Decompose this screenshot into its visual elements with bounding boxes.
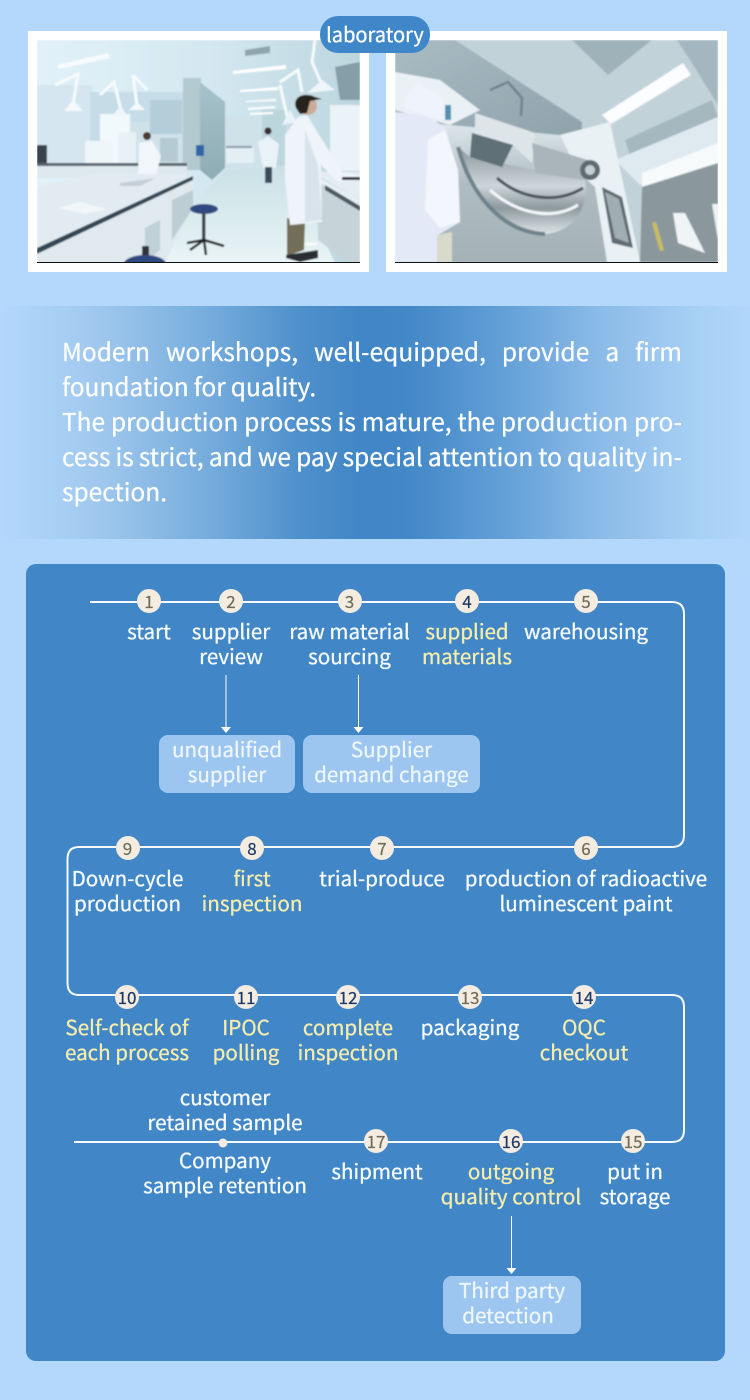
box: third party detection bbox=[443, 1276, 581, 1334]
step 8: first inspection: first bbox=[233, 862, 271, 892]
step 9: down-cycle production bbox=[72, 835, 183, 917]
box: supplier demand change: Supplier bbox=[351, 733, 432, 763]
text band: description bbox=[0, 306, 750, 539]
step 7: trial-produce bbox=[319, 835, 445, 892]
box: supplier demand change: demand change bbox=[314, 758, 469, 788]
step 6: production of radioactive luminescent paint bbox=[465, 835, 707, 917]
panel: process flowchart bbox=[26, 564, 725, 1361]
step 10: self-check of each process bbox=[65, 984, 190, 1066]
step 12: complete inspection: inspection bbox=[298, 1036, 398, 1066]
step 15: put in storage: put in bbox=[607, 1155, 663, 1185]
step 5: warehousing: warehousing bbox=[524, 615, 648, 645]
step 16: outgoing quality control bbox=[441, 1128, 581, 1210]
step 7: trial-produce: trial-produce bbox=[319, 862, 445, 892]
step 1: start: start bbox=[127, 615, 171, 645]
step 13: packaging bbox=[421, 984, 520, 1041]
box: third party detection: Third party bbox=[459, 1274, 565, 1304]
step 16: outgoing quality control: quality control bbox=[441, 1180, 581, 1210]
step 14: OQC checkout: 14 bbox=[575, 984, 593, 1009]
step 6: production of radioactive luminescent paint: production of radioactive bbox=[465, 862, 707, 892]
panel: laboratory photos bbox=[28, 16, 727, 272]
step 16: outgoing quality control: outgoing bbox=[468, 1155, 554, 1185]
step 3: raw material sourcing: 3 bbox=[345, 588, 354, 613]
step 9: down-cycle production: production bbox=[74, 887, 181, 917]
step 6: production of radioactive luminescent paint: luminescent paint bbox=[499, 887, 673, 917]
step 3: raw material sourcing bbox=[289, 588, 410, 670]
step 2: supplier review: 2 bbox=[226, 588, 236, 613]
step 9: down-cycle production: 9 bbox=[123, 835, 132, 860]
big bench bbox=[37, 173, 193, 248]
step 17: shipment: shipment bbox=[331, 1155, 423, 1185]
step 9: down-cycle production: Down-cycle bbox=[72, 862, 183, 892]
fume arms bbox=[55, 40, 322, 120]
person: back bbox=[143, 132, 151, 140]
label: company sample retention: Company bbox=[179, 1144, 271, 1174]
step 6: production of radioactive luminescent paint: 6 bbox=[581, 835, 591, 860]
step 2: supplier review bbox=[192, 588, 270, 670]
label: company sample retention: sample retention bbox=[143, 1169, 307, 1199]
label: customer retained sample: retained sample bbox=[147, 1106, 303, 1136]
person: far bbox=[264, 127, 272, 135]
step 11: IPOC polling: polling bbox=[213, 1036, 279, 1066]
step 11: IPOC polling: 11 bbox=[237, 984, 255, 1009]
wall lower bbox=[395, 120, 607, 262]
box: third party detection: detection bbox=[462, 1299, 554, 1329]
step 4: supplied materials bbox=[422, 588, 512, 670]
ceiling light bbox=[602, 63, 691, 124]
text band: description: foundation for quality. bbox=[62, 369, 316, 404]
step 7: trial-produce: 7 bbox=[377, 835, 387, 860]
box: unqualified supplier: unqualified bbox=[172, 733, 282, 763]
step 4: supplied materials: supplied bbox=[425, 615, 509, 645]
step 8: first inspection: 8 bbox=[247, 835, 257, 860]
step 17: shipment: 17 bbox=[367, 1128, 385, 1153]
step 1: start: 1 bbox=[144, 588, 154, 613]
step 8: first inspection: inspection bbox=[202, 887, 302, 917]
step 10: self-check of each process: 10 bbox=[118, 984, 136, 1009]
wall upper left bbox=[395, 40, 582, 140]
step 14: OQC checkout: OQC bbox=[562, 1011, 606, 1041]
person: suit bbox=[395, 112, 460, 262]
step 13: packaging: packaging bbox=[421, 1011, 519, 1041]
box: supplier demand change bbox=[303, 735, 480, 793]
text band: description: The production process is mature, the production pro- bbox=[62, 404, 682, 439]
step 3: raw material sourcing: sourcing bbox=[308, 640, 391, 670]
step 2: supplier review: supplier bbox=[192, 615, 270, 645]
box: unqualified supplier: supplier bbox=[188, 758, 266, 788]
step 16: outgoing quality control: 16 bbox=[502, 1128, 520, 1153]
heading pill: laboratory: laboratory bbox=[326, 19, 424, 48]
tap bbox=[490, 82, 522, 116]
photo: laboratory room bbox=[28, 31, 369, 272]
step 10: self-check of each process: Self-check of bbox=[65, 1011, 189, 1041]
step 12: complete inspection: complete bbox=[303, 1011, 393, 1041]
label: customer retained sample bbox=[147, 1081, 303, 1136]
person: scientist bbox=[287, 218, 305, 256]
floor bbox=[160, 165, 335, 263]
stool bbox=[187, 204, 224, 255]
step 11: IPOC polling bbox=[213, 984, 280, 1066]
glove bbox=[673, 213, 705, 253]
text band: description: Modern workshops, well-equipped, provide a firm bbox=[62, 334, 682, 369]
text band: description: spection. bbox=[62, 474, 167, 509]
step 15: put in storage: 15 bbox=[624, 1128, 642, 1153]
step 14: OQC checkout: checkout bbox=[540, 1036, 628, 1066]
step 4: supplied materials: materials bbox=[422, 640, 512, 670]
text band: description: cess is strict, and we pay special attention to quality in- bbox=[62, 439, 682, 474]
step 12: complete inspection bbox=[298, 984, 398, 1066]
label: company sample retention bbox=[143, 1144, 307, 1199]
step 14: OQC checkout bbox=[540, 984, 628, 1066]
step 13: packaging: 13 bbox=[461, 984, 479, 1009]
flow line and arrows bbox=[66, 601, 685, 1274]
floor reflections bbox=[287, 190, 317, 245]
step 5: warehousing bbox=[524, 588, 648, 645]
step 12: complete inspection: 12 bbox=[339, 984, 357, 1009]
step 15: put in storage bbox=[600, 1128, 670, 1210]
step 11: IPOC polling: IPOC bbox=[222, 1011, 270, 1041]
ceiling lights bbox=[233, 65, 286, 74]
step 2: supplier review: review bbox=[199, 640, 263, 670]
machine bbox=[458, 147, 586, 234]
step 10: self-check of each process: each process bbox=[65, 1036, 189, 1066]
step 4: supplied materials: 4 bbox=[462, 588, 472, 613]
benches back bbox=[37, 145, 47, 163]
label: customer retained sample: customer bbox=[180, 1081, 270, 1111]
photo: clean room equipment bbox=[386, 31, 727, 272]
right bench bbox=[330, 105, 360, 171]
step 8: first inspection bbox=[202, 835, 302, 917]
white pillar and door bbox=[560, 122, 640, 262]
step 15: put in storage: storage bbox=[600, 1180, 670, 1210]
box: unqualified supplier bbox=[159, 735, 295, 793]
heading pill: laboratory bbox=[320, 16, 430, 53]
step 17: shipment bbox=[331, 1128, 423, 1185]
step 1: start bbox=[127, 588, 171, 645]
step 3: raw material sourcing: raw material bbox=[289, 615, 410, 645]
step 5: warehousing: 5 bbox=[581, 588, 591, 613]
